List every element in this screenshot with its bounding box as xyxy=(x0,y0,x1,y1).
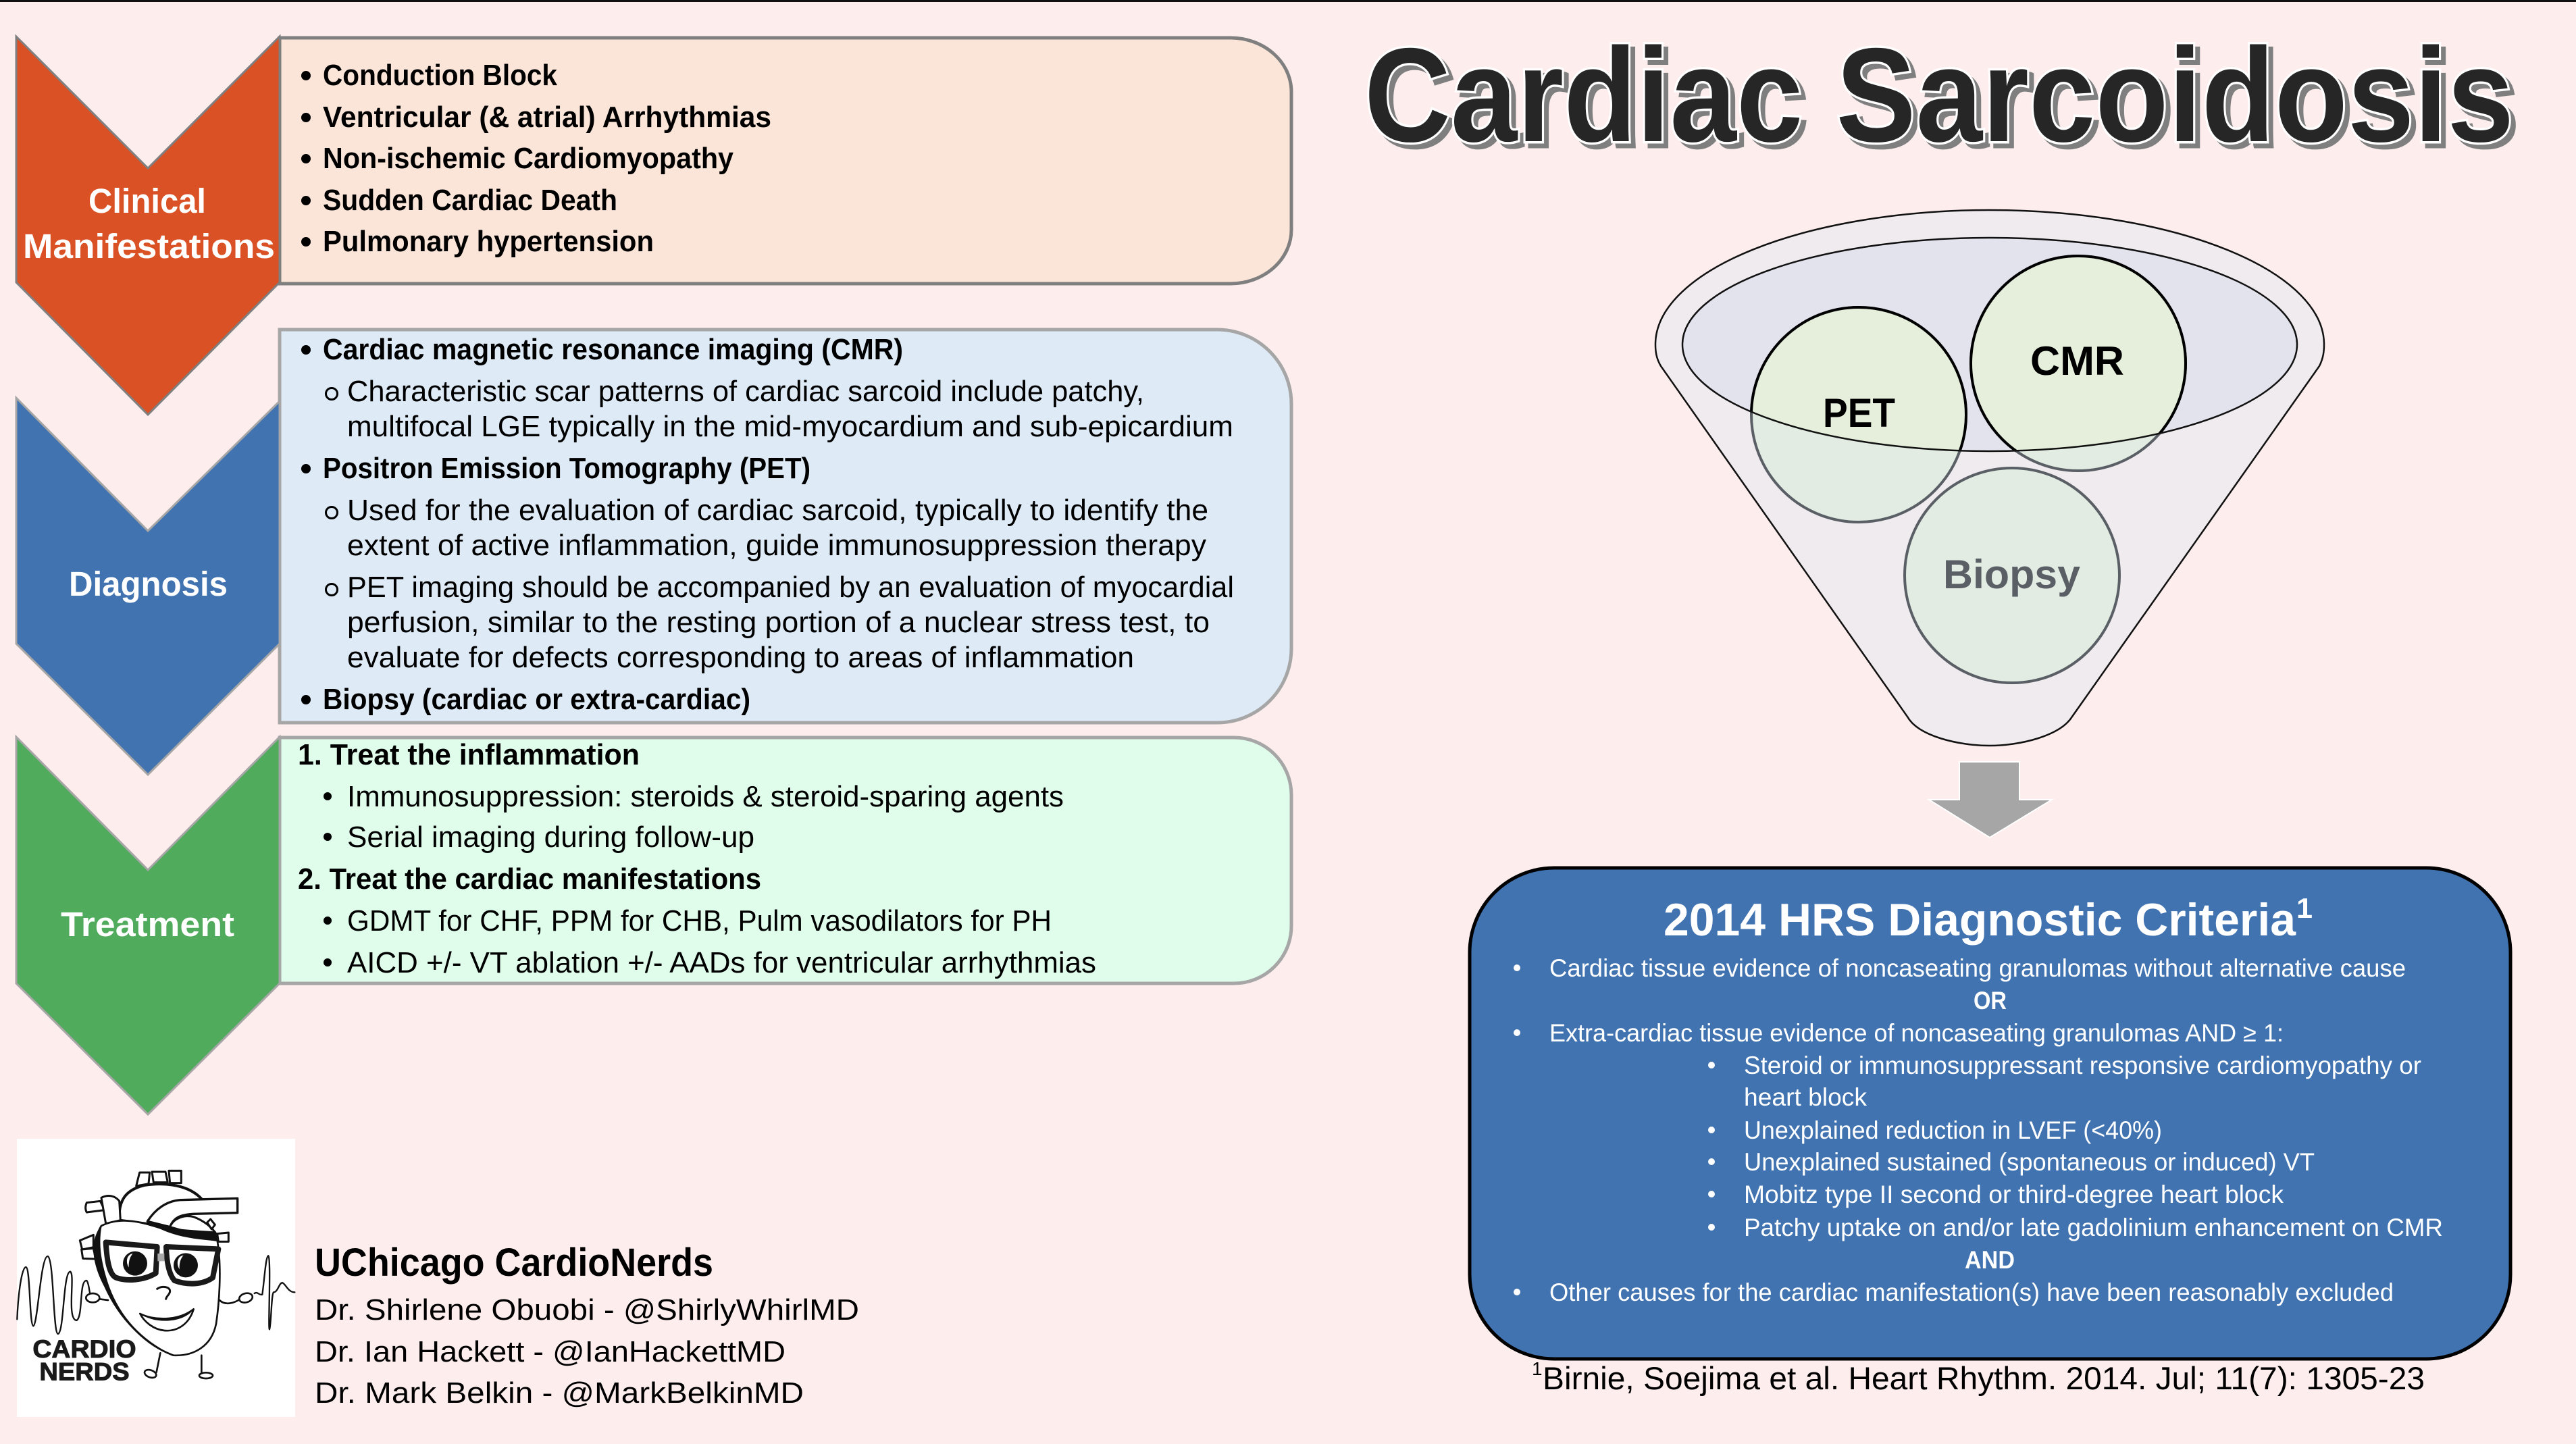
panel: 2014 HRS diagnostic criteria xyxy=(1470,868,2510,1359)
circle: cmr xyxy=(1971,256,2186,471)
icon: glasses xyxy=(106,1242,218,1284)
criteria heading: 2014 HRS Diagnostic Criteria xyxy=(1664,894,2296,946)
credits: team: Dr. Ian Hackett - @IanHackettMD xyxy=(315,1335,785,1368)
criteria list: heart block xyxy=(1744,1083,1867,1111)
citation: 1 xyxy=(1532,1358,1543,1379)
criteria list: OR xyxy=(1974,987,2007,1014)
panel: diagnosis list: Positron Emission Tomography (PET) xyxy=(323,452,810,485)
panel: diagnosis list: Used for the evaluation of cardiac sarcoid, typically to identify the xyxy=(347,494,1208,527)
chevron: clinical manifestations: Clinical xyxy=(88,182,206,220)
panel: diagnosis list: Cardiac magnetic resonance imaging (CMR) xyxy=(323,333,903,366)
icon: right ecg wave xyxy=(255,1256,294,1329)
criteria list: Cardiac tissue evidence of noncaseating granulomas without alternative cause xyxy=(1549,954,2406,982)
funnel diagram xyxy=(1655,210,2324,746)
panel: clinical manifestations list: Ventricular (& atrial) Arrhythmias xyxy=(323,101,771,134)
panel: diagnosis list: Characteristic scar patterns of cardiac sarcoid include patchy, xyxy=(347,375,1144,408)
icon: eyes xyxy=(123,1252,147,1276)
chevron: clinical manifestations: Manifestations xyxy=(23,227,275,265)
icon: heart vessels xyxy=(80,1170,238,1259)
panel: treatment list: GDMT for CHF, PPM for CHB, Pulm vasodilators for PH xyxy=(347,904,1052,937)
criteria list: Extra-cardiac tissue evidence of noncaseating granulomas AND ≥ 1: xyxy=(1549,1019,2284,1047)
panel: treatment list: Immunosuppression: steroids & steroid-sparing agents xyxy=(347,780,1064,813)
icon: legs and feet xyxy=(157,1353,201,1373)
panel: clinical manifestations list: Non-ischemic Cardiomyopathy xyxy=(323,142,733,175)
panel: treatment list: 1. Treat the inflammation xyxy=(298,738,640,771)
circle: cmr: CMR xyxy=(2030,338,2124,384)
citation: Birnie, Soejima et al. Heart Rhythm. 2014. Jul; 11(7): 1305-23 xyxy=(1543,1360,2425,1396)
panel: diagnosis list: multifocal LGE typically in the mid-myocardium and sub-epicardium xyxy=(347,410,1233,443)
icon: left ecg wave xyxy=(17,1256,90,1334)
logo wordmark: NERDS xyxy=(39,1357,130,1385)
chevron: diagnosis: Diagnosis xyxy=(69,565,228,603)
icon: arms and hands xyxy=(99,1298,242,1304)
circle: pet: PET xyxy=(1823,390,1895,436)
panel: treatment list: 2. Treat the cardiac manifestations xyxy=(298,862,761,896)
criteria list: Patchy uptake on and/or late gadolinium enhancement on CMR xyxy=(1744,1214,2443,1241)
logo: cardionerds heart xyxy=(17,1139,295,1417)
criteria heading: 1 xyxy=(2296,892,2313,924)
panel: clinical manifestations list: Pulmonary hypertension xyxy=(323,225,654,258)
panel: diagnosis list: evaluate for defects corresponding to areas of inflammation xyxy=(347,641,1134,674)
criteria list: Unexplained reduction in LVEF (<40%) xyxy=(1744,1116,2162,1144)
chevron: treatment: Treatment xyxy=(61,905,234,944)
panel: treatment list: AICD +/- VT ablation +/- AADs for ventricular arrhythmias xyxy=(347,946,1096,979)
criteria list xyxy=(1514,954,2443,1306)
panel: clinical manifestations list: Sudden Cardiac Death xyxy=(323,184,617,217)
panel: diagnosis list: Biopsy (cardiac or extra-cardiac) xyxy=(323,683,750,716)
icon: heart body xyxy=(97,1220,220,1356)
logo wordmark: CARDIO xyxy=(32,1335,136,1363)
panel: diagnosis list xyxy=(280,330,1291,723)
criteria list: Other causes for the cardiac manifestation(s) have been reasonably excluded xyxy=(1549,1279,2394,1306)
panel: treatment list xyxy=(280,738,1291,983)
credits: team: UChicago CardioNerds xyxy=(315,1241,713,1285)
circle: pet xyxy=(1751,307,1966,522)
panel: clinical manifestations list xyxy=(280,38,1291,284)
arrow: funnel to criteria xyxy=(1929,762,2052,837)
criteria list: AND xyxy=(1965,1246,2015,1274)
icon: smile xyxy=(140,1309,194,1331)
chevron: diagnosis xyxy=(16,398,280,775)
panel: treatment list: Serial imaging during follow-up xyxy=(347,821,754,854)
panel: diagnosis list: perfusion, similar to the resting portion of a nuclear stress test, to xyxy=(347,606,1210,639)
panel: diagnosis list: PET imaging should be accompanied by an evaluation of myocardial xyxy=(347,571,1234,604)
panel: diagnosis list: extent of active inflammation, guide immunosuppression therapy xyxy=(347,529,1206,562)
criteria list: Steroid or immunosuppressant responsive cardiomyopathy or xyxy=(1744,1052,2421,1079)
circle: biopsy xyxy=(1905,468,2119,683)
chevron: treatment xyxy=(16,737,280,1114)
panel: clinical manifestations list: Conduction Block xyxy=(323,59,557,92)
icon: nose xyxy=(157,1287,170,1299)
criteria list: Unexplained sustained (spontaneous or induced) VT xyxy=(1744,1148,2315,1176)
credits: team: Dr. Shirlene Obuobi - @ShirlyWhirlMD xyxy=(315,1293,859,1326)
funnel body xyxy=(1655,210,2324,746)
chevron: clinical manifestations xyxy=(16,36,280,415)
logo wordmark xyxy=(32,1335,136,1385)
circle: biopsy: Biopsy xyxy=(1943,552,2081,597)
criteria list: Mobitz type II second or third-degree heart block xyxy=(1744,1181,2284,1208)
credits: team: Dr. Mark Belkin - @MarkBelkinMD xyxy=(315,1376,804,1410)
credits: team xyxy=(315,1241,859,1410)
